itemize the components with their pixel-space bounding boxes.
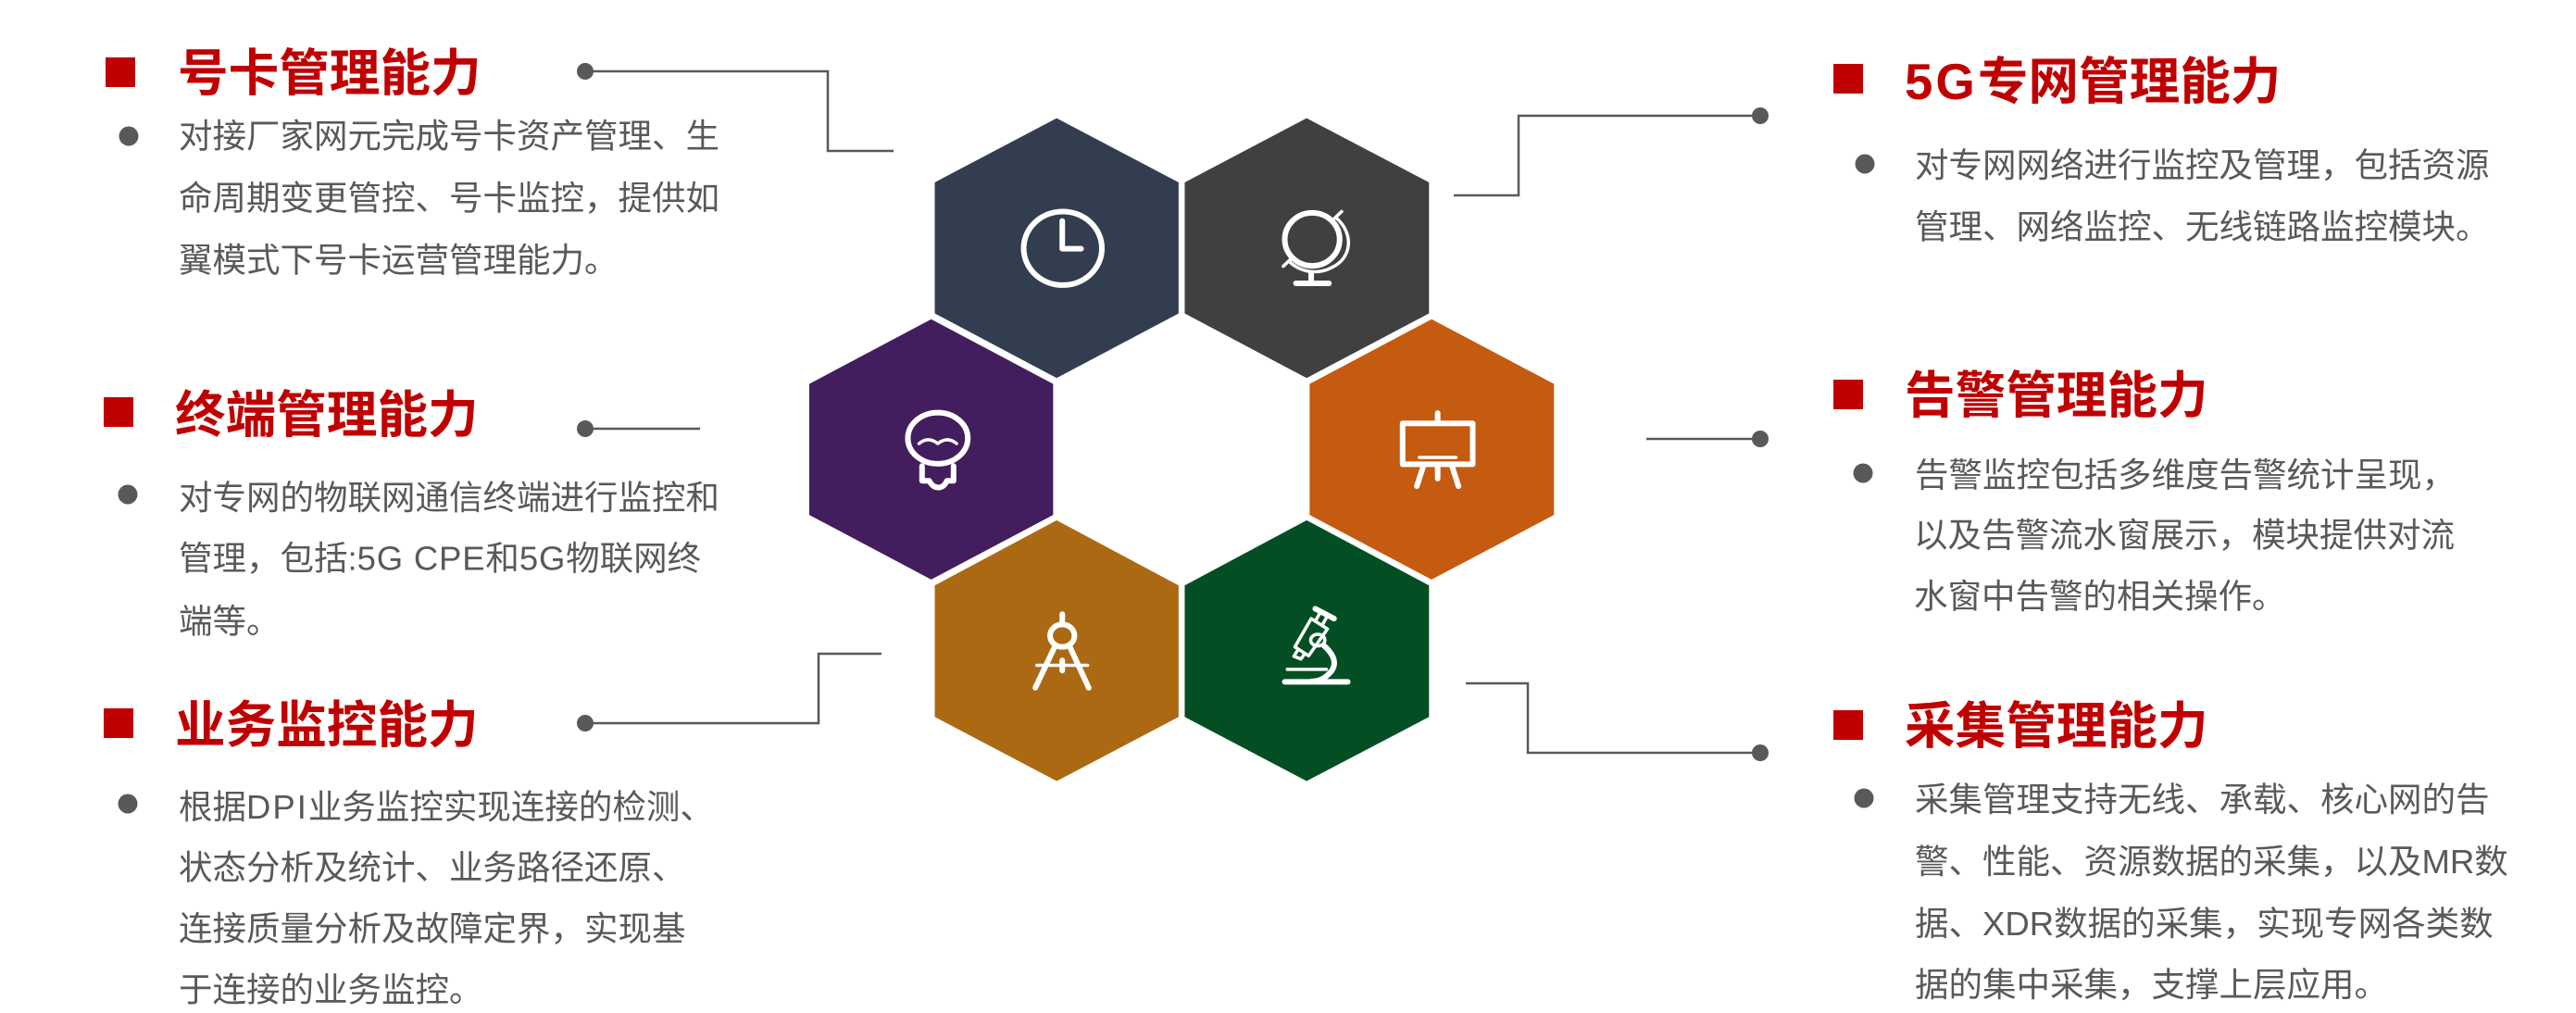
bullet	[119, 126, 139, 146]
description text	[179, 117, 719, 280]
heading marker	[104, 397, 133, 427]
heading: alarm management: 告警管理能力	[1905, 368, 2208, 424]
hexagon cluster	[809, 119, 1554, 782]
description text: 警、性能、资源数据的采集，以及MR数	[1915, 843, 2508, 881]
description text: 对接厂家网元完成号卡资产管理、生	[179, 117, 719, 156]
hexagon: microscope	[1184, 520, 1429, 782]
bullet	[1854, 463, 1872, 483]
heading marker	[106, 57, 135, 87]
bullet	[119, 794, 137, 813]
heading marker	[1833, 710, 1863, 740]
bullet	[1854, 789, 1874, 807]
hexagon: light bulb	[809, 319, 1053, 580]
description text: 管理，包括:5G CPE和5G物联网终	[179, 539, 701, 578]
connector: terminal to bulb hexagon	[577, 420, 700, 437]
panel: collection management	[1833, 698, 2508, 1004]
heading: SIM card management: 号卡管理能力	[178, 45, 481, 102]
description text: 对专网的物联网通信终端进行监控和	[179, 479, 719, 517]
heading marker	[1833, 64, 1863, 94]
panel: terminal management	[104, 387, 719, 641]
icon: compass	[1035, 614, 1089, 688]
panel: service monitoring	[104, 697, 714, 1009]
connector: SIM card to clock hexagon	[577, 63, 894, 151]
bullet	[119, 485, 137, 504]
hexagon: globe	[1184, 119, 1429, 378]
description text: 连接质量分析及故障定界，实现基	[179, 909, 685, 948]
description text: 采集管理支持无线、承载、核心网的告	[1915, 781, 2489, 819]
icon: microscope	[1285, 608, 1348, 682]
heading: service monitoring: 业务监控能力	[175, 697, 479, 754]
description text: 据、XDR数据的采集，实现专网各类数	[1915, 905, 2494, 943]
connector: alarm to easel hexagon	[1646, 431, 1769, 447]
hexagon: clock	[935, 119, 1179, 378]
description text	[1915, 146, 2489, 246]
description text: 管理、网络监控、无线链路监控模块。	[1915, 207, 2489, 246]
description text: 命周期变更管控、号卡监控，提供如	[179, 180, 719, 217]
hexagon: easel	[1309, 319, 1554, 580]
heading: 5G private network management: 5G专网管理能力	[1905, 54, 2281, 110]
icon: easel	[1403, 413, 1472, 486]
description text: 以及告警流水窗展示，模块提供对流	[1914, 517, 2455, 554]
description text	[1914, 456, 2456, 615]
description text: 水窗中告警的相关操作。	[1914, 578, 2285, 615]
description text: 据的集中采集，支撑上层应用。	[1915, 966, 2388, 1004]
panel: alarm management	[1833, 368, 2456, 615]
hexagon: compass	[935, 520, 1179, 782]
icon: clock	[1024, 211, 1102, 285]
heading: collection management: 采集管理能力	[1905, 698, 2208, 755]
heading marker	[1833, 380, 1863, 409]
description text: 状态分析及统计、业务路径还原、	[179, 848, 685, 887]
description text: 端等。	[179, 602, 280, 641]
description text: 对专网网络进行监控及管理，包括资源	[1915, 146, 2489, 184]
heading: terminal management: 终端管理能力	[175, 387, 479, 444]
panel: SIM card management	[106, 45, 719, 280]
description text	[179, 479, 719, 641]
description text: 于连接的业务监控。	[179, 970, 483, 1009]
description text	[1915, 781, 2508, 1004]
icon: globe	[1283, 211, 1348, 283]
connector: service to compass hexagon	[577, 654, 882, 732]
connector: collection to microscope hexagon	[1466, 683, 1769, 761]
description text: 翼模式下号卡运营管理能力。	[179, 241, 619, 280]
description text: 根据DPI业务监控实现连接的检测、	[179, 788, 714, 826]
heading marker	[104, 708, 133, 738]
bullet	[1856, 154, 1874, 174]
icon: light bulb	[907, 413, 968, 488]
connector: 5G network to globe hexagon	[1454, 107, 1769, 195]
panel: 5G private network management	[1833, 54, 2489, 246]
description text	[179, 788, 714, 1009]
description text: 告警监控包括多维度告警统计呈现，	[1915, 456, 2456, 494]
